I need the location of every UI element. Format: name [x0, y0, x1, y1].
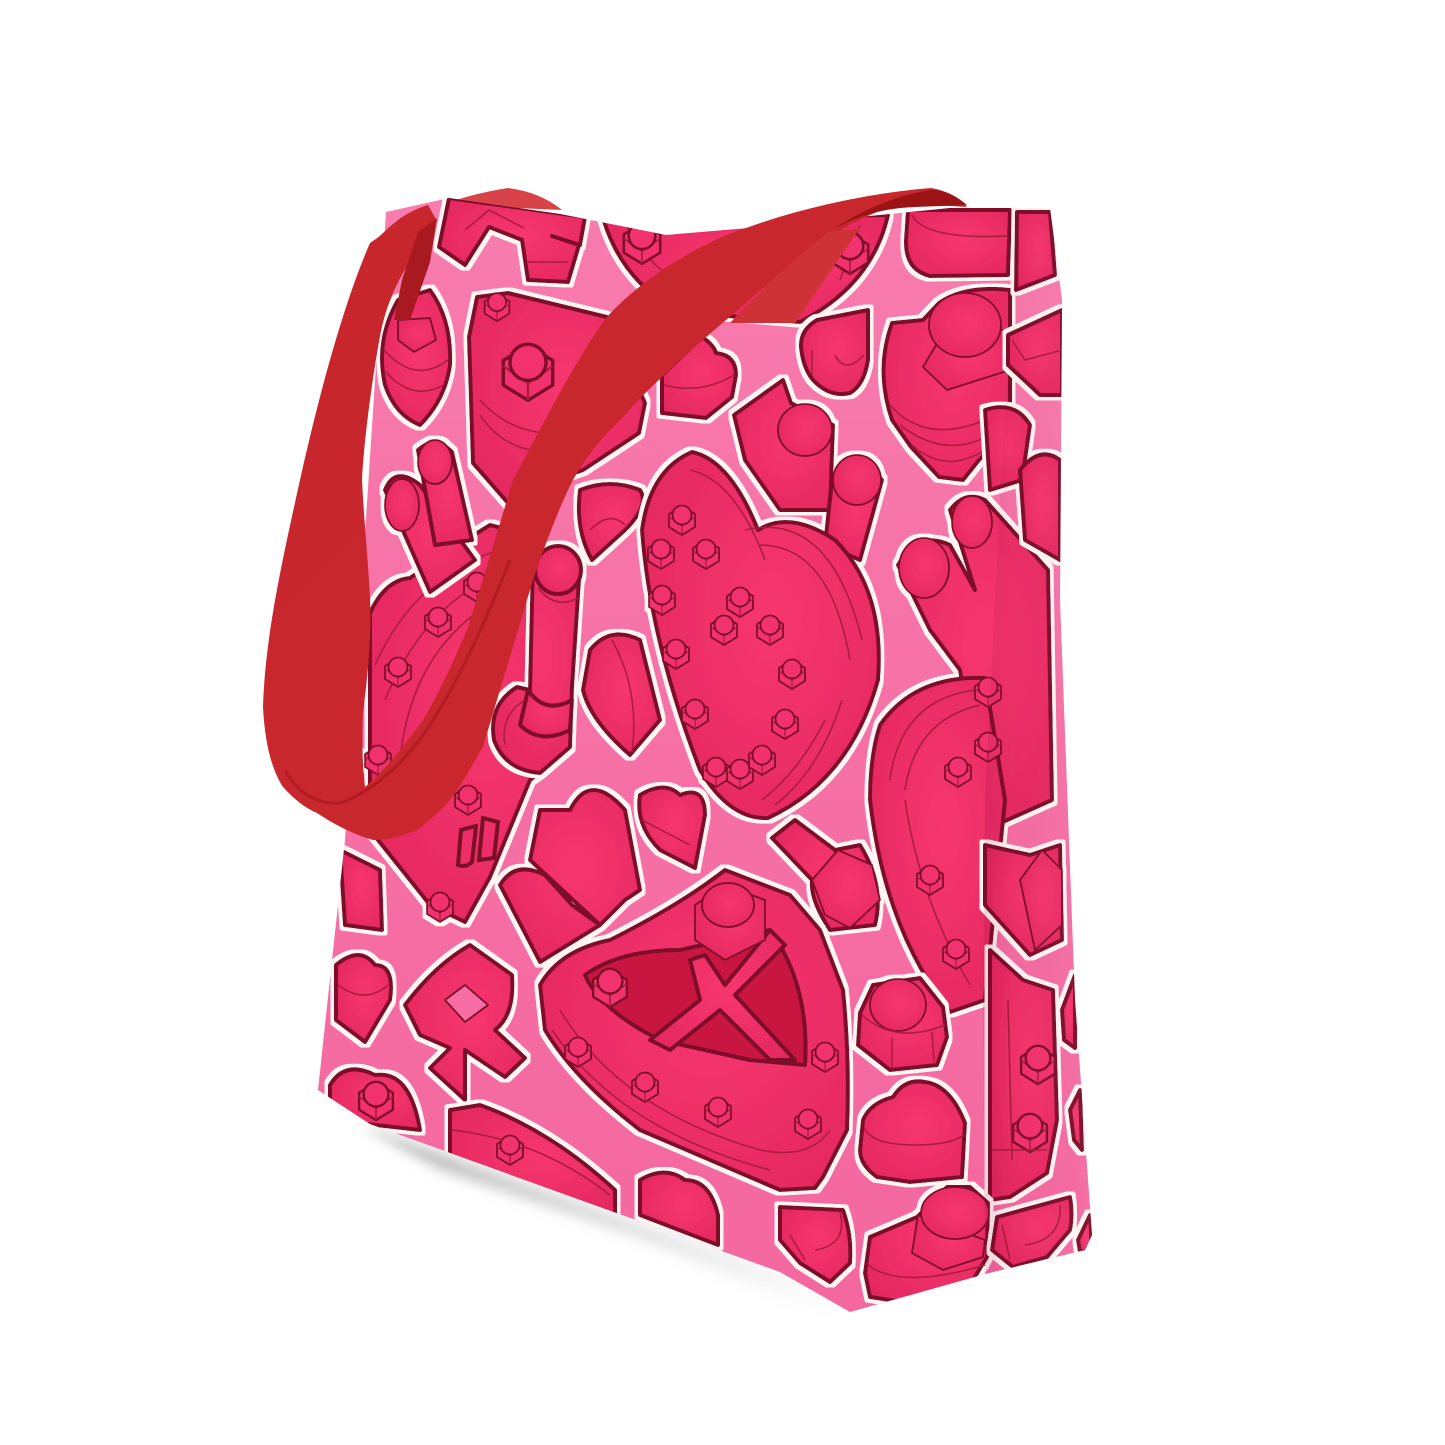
sticker: bottom heart [640, 1172, 718, 1245]
sticker: left elbow pipe [493, 546, 581, 773]
sticker pattern [330, 198, 1092, 1302]
sticker: small heart above bottom heart [639, 788, 705, 868]
sticker: heart block lower right [860, 1081, 965, 1182]
sticker: top wrench [439, 198, 585, 282]
sticker: large central heart flange [642, 380, 882, 818]
sticker: side panel pipes top [985, 407, 1060, 560]
strap lower fold [285, 560, 510, 803]
sticker: right large heart machine on fold [870, 496, 1052, 1012]
flange body [642, 452, 879, 818]
strap: back band behind bag [370, 188, 562, 243]
sticker: large wrench [405, 945, 525, 1100]
maker logo [458, 818, 498, 866]
sticker: side edge hearts [1062, 975, 1092, 1252]
sticker: side top heart [1008, 310, 1062, 395]
sticker: right side gear heart [990, 950, 1057, 1200]
ground shadow [360, 1125, 850, 1312]
bolt ring [669, 506, 695, 535]
sticker: top right heart block [906, 210, 1010, 276]
strap stitch tab right [730, 228, 860, 323]
sticker: top bevel bolt stack [382, 290, 450, 425]
sticker: top heart gear [603, 215, 888, 322]
sticker: bottom heart machine [500, 790, 848, 1190]
tote bag body [318, 198, 1092, 1312]
sticker: heart gear with bolt [469, 293, 645, 503]
sticker: lower left bolted heart [330, 1069, 420, 1130]
strap inner shade [832, 190, 967, 230]
sticker: left hidden pipes [385, 440, 475, 592]
strap: front handle loop [263, 188, 967, 840]
side panel shading [983, 208, 1092, 1274]
sticker: bottom side heart [992, 1197, 1072, 1267]
sticker: left small heart [340, 850, 382, 930]
bag fabric background [318, 198, 1092, 1312]
sticker: bottom bolted stack [865, 1187, 989, 1302]
sticker: right stacked bolt heart [884, 289, 1010, 480]
sticker: small heart block [662, 337, 736, 418]
sticker: hex nut with dome [858, 978, 947, 1070]
sticker: bolt right of centre [772, 820, 880, 930]
sticker: left large heart machine [365, 525, 575, 922]
strap stitch tab left [394, 218, 437, 320]
sticker: bolt on fold [985, 845, 1062, 955]
sticker: small heart beside strap [579, 484, 643, 560]
sticker: bottom left-of-corner heart [780, 1207, 850, 1282]
sticker: bottom edge wedge [450, 1105, 615, 1215]
sticker: tilted heart top [801, 310, 868, 394]
sticker: left heart [336, 955, 391, 1042]
sticker: tilted heart centre-left [583, 634, 660, 755]
upper pipes [734, 380, 833, 510]
sticker: top side block [1016, 212, 1055, 290]
strap band [263, 188, 967, 840]
